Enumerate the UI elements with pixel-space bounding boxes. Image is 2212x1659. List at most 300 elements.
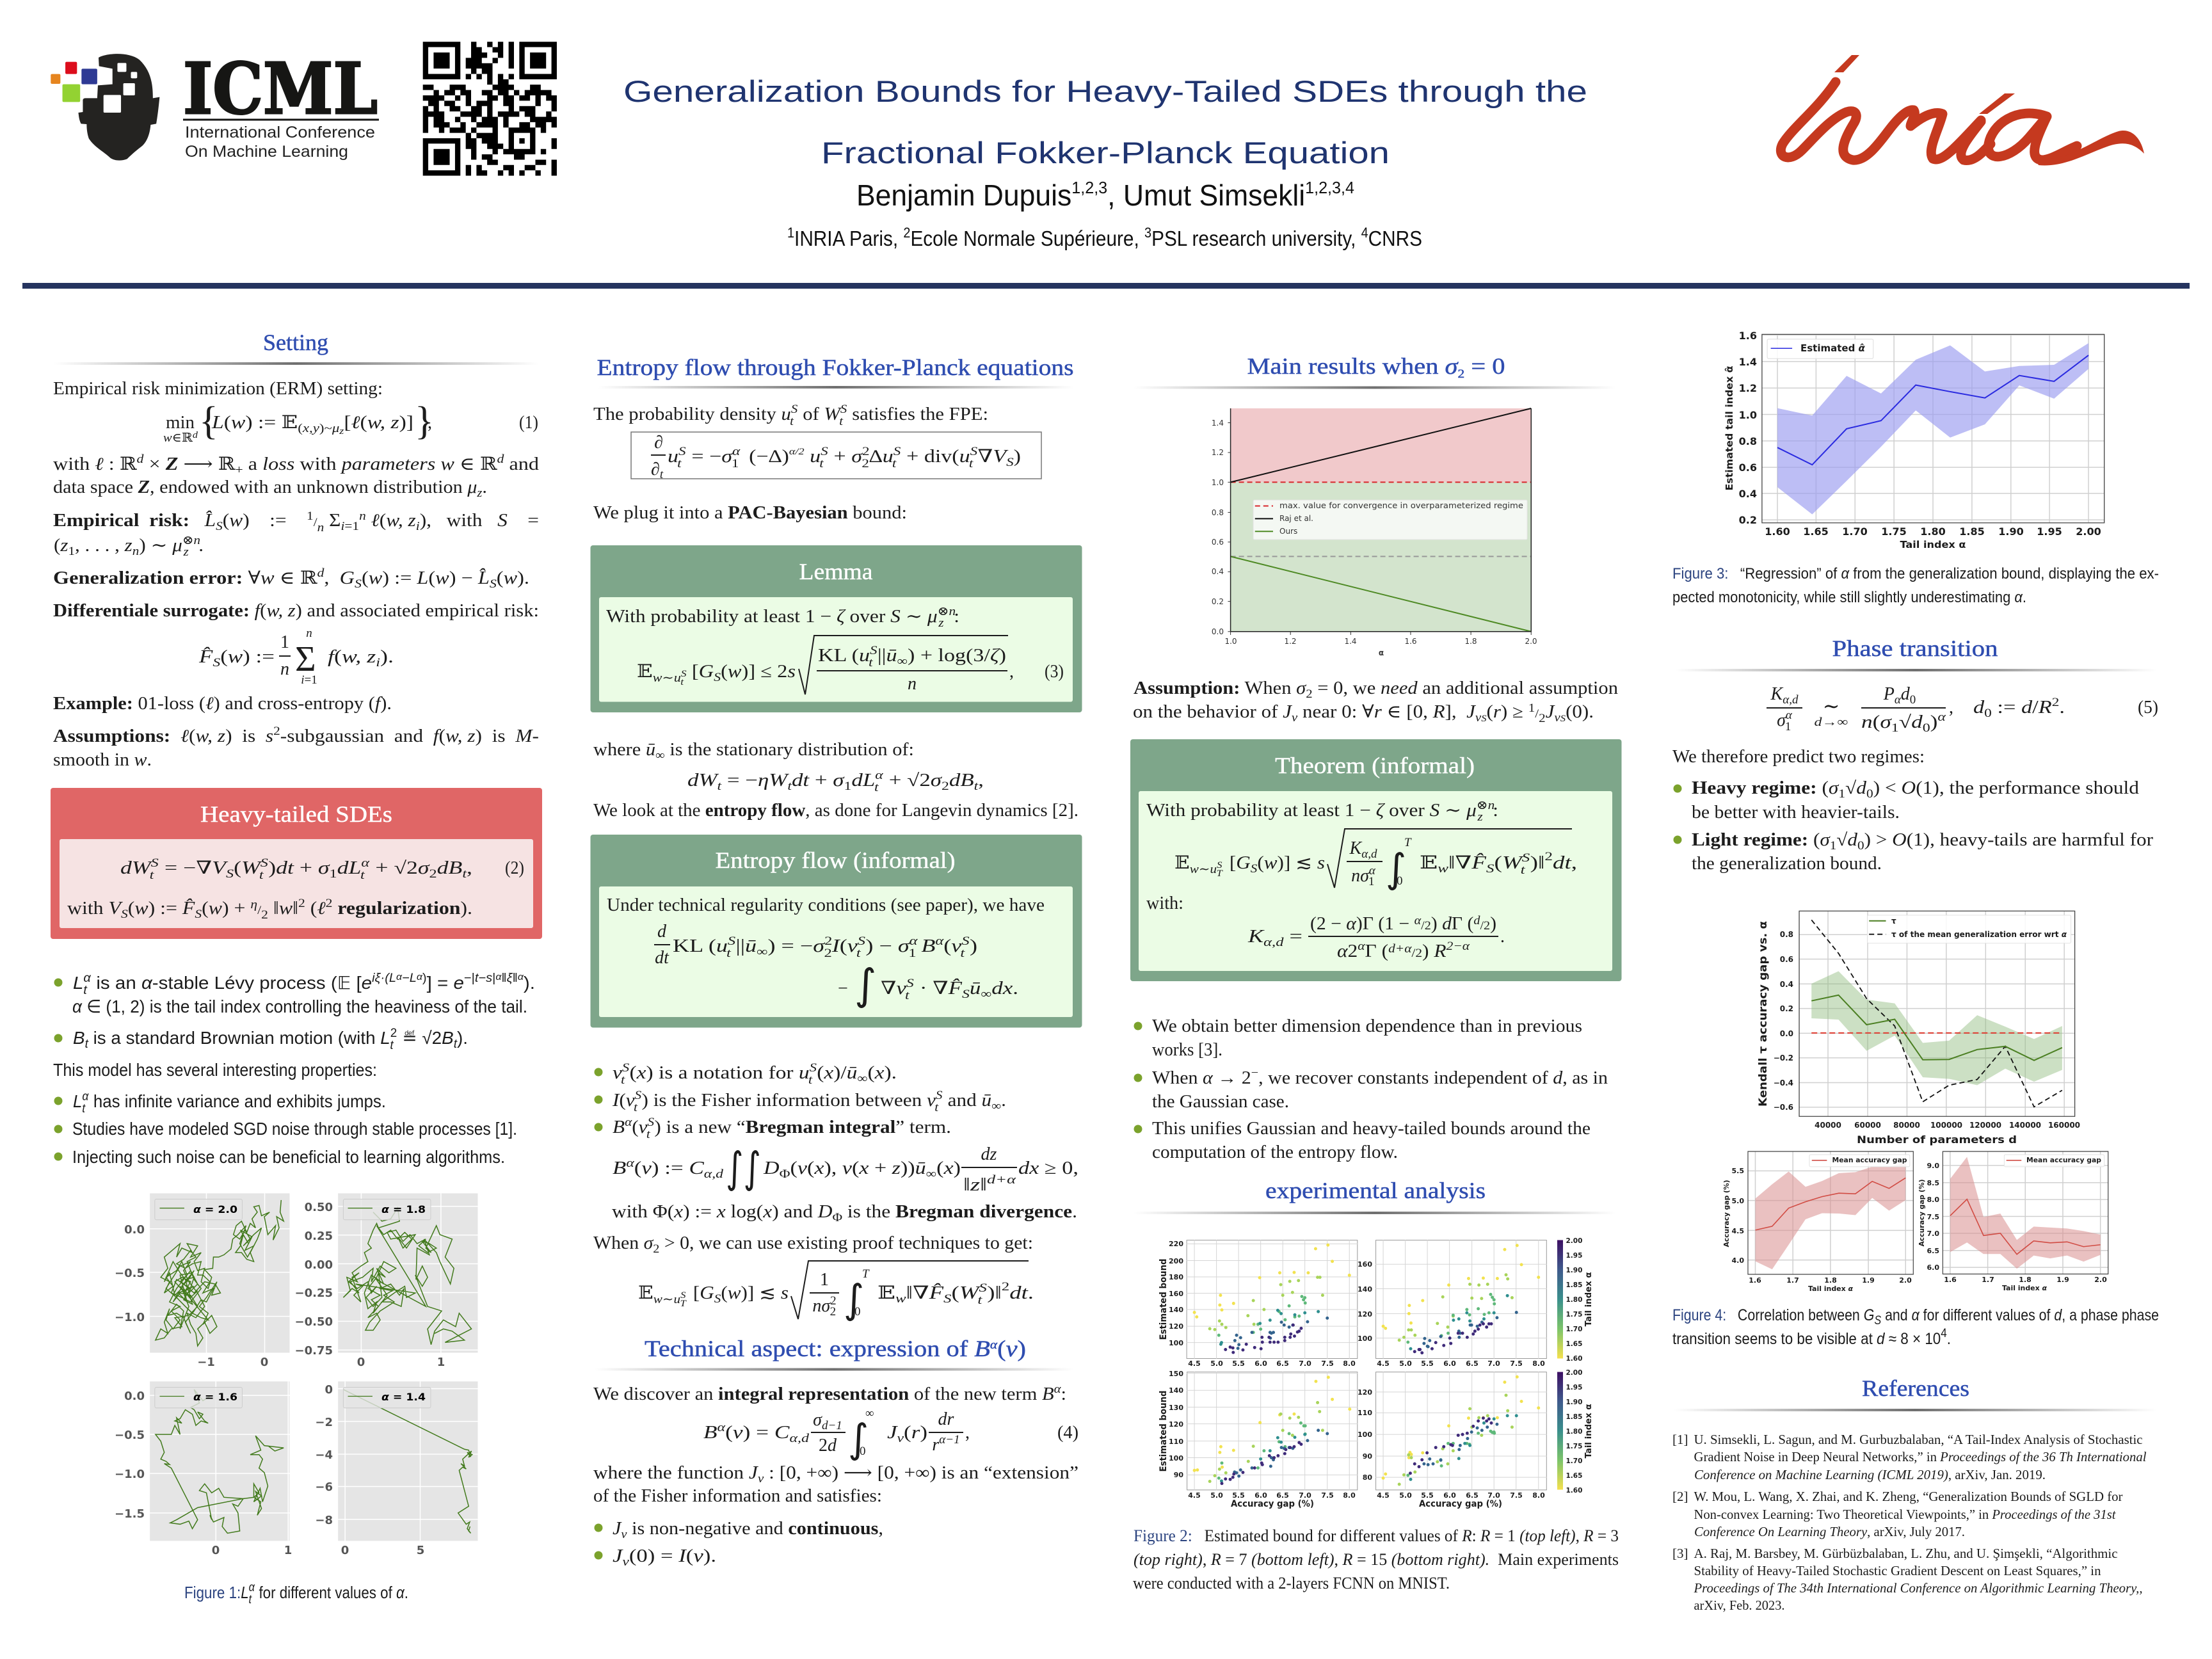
equation: entropy flow: dx	[991, 979, 1013, 998]
bullet list: regimes: d	[1856, 778, 1867, 798]
equation: K constant: /2	[1480, 919, 1490, 933]
bullet list: Lévy and Brownian: iξ·(L	[372, 972, 396, 985]
affiliations: 4	[1361, 225, 1368, 241]
figure 4: phase transition charts	[1672, 911, 2159, 1348]
equation: Bregman integral: α,d	[704, 1167, 724, 1181]
bullet list: Lévy and Brownian: α	[83, 972, 92, 985]
legend: colorbar bottom: 1.75	[1566, 1443, 1582, 1450]
text block: differentiable surrogate: w) :=	[228, 647, 268, 667]
bullet list: Lévy and Brownian: α	[396, 972, 403, 982]
bullet list: notations: S	[810, 1061, 817, 1075]
text block: ERM setting: and	[504, 454, 539, 474]
chart: constant comparison: 2.0	[1525, 637, 1537, 646]
equation 3: S	[870, 644, 878, 657]
text block: FPE intro: t	[839, 415, 844, 428]
equation 5: :=	[1992, 698, 2021, 717]
text block: stationary distribution: We look at the entropy flow, as done for Langevin dynamics [2].	[593, 801, 1078, 821]
heading: Lemma: Lemma	[799, 559, 873, 584]
equation 5: ,	[1949, 698, 1953, 717]
text: with: with:	[1146, 894, 1183, 913]
legend: colorbar top: 1.80	[1566, 1296, 1582, 1304]
heading: main results: Main results when σ	[1247, 353, 1456, 379]
affiliations: INRIA Paris,	[794, 227, 903, 250]
chart: scatter R=1: 220	[1169, 1240, 1183, 1248]
regularization line: (	[202, 899, 209, 918]
text block: differentiable surrogate: F̂	[198, 647, 213, 667]
equation: Bregman integral: (	[790, 1158, 797, 1178]
chart: walk alpha 1.6: 0	[212, 1544, 220, 1557]
equation: theorem bound	[1174, 829, 1577, 892]
heading: Setting: Setting	[263, 330, 328, 355]
title	[623, 74, 1587, 170]
equation: Bregman integral: x)	[944, 1158, 959, 1178]
figure 1: stable process trajectories	[115, 1193, 477, 1607]
chart: scatter R=7: 140	[1169, 1386, 1183, 1395]
equation 3: S	[714, 671, 721, 684]
chart: walk alpha 1.8: −0.25	[294, 1286, 333, 1300]
chart: scatter R=3: 7.5	[1510, 1359, 1523, 1368]
text block: differentiable surrogate	[53, 601, 539, 687]
chart: scatter R=1: 6.0	[1254, 1359, 1267, 1368]
chart: accuracy gap large d	[1918, 1151, 2108, 1292]
equation: K constant: /2	[1421, 919, 1431, 933]
text block: stationary distribution: dW	[687, 771, 719, 790]
equation: theorem bound: (	[1257, 853, 1264, 873]
legend: colorbar top: 1.90	[1566, 1267, 1582, 1274]
text block: example: Example: 01-loss ( ℓ) and cross-entropy ( f).	[53, 694, 392, 714]
text block: differentiable surrogate: Σ	[295, 639, 316, 679]
text block: ERM setting	[53, 379, 539, 500]
chart: walk alpha 1.8: −0.75	[294, 1344, 333, 1358]
icon: ICML head	[51, 54, 159, 161]
bullet list: theorem remarks: We obtain better dimension dependence than in previous	[1152, 1016, 1582, 1036]
caption: figure 1: α	[249, 1581, 255, 1594]
chart: walk alpha 1.8: 0.00	[305, 1258, 333, 1272]
chart: walk alpha 2.0: −1.0	[115, 1311, 145, 1324]
chart: walk alpha 2.0: α = 2.0	[193, 1203, 237, 1215]
text block: stationary distribution: dB	[949, 771, 974, 790]
heading: Entropy flow (informal): Entropy flow (informal)	[716, 847, 955, 873]
equation: theorem bound: w	[1438, 862, 1448, 876]
bullet list: regimes: the generalization bound.	[1692, 854, 1882, 874]
chart: walk alpha 1.6	[115, 1381, 292, 1557]
equation box: FPE: ∆	[869, 447, 883, 467]
caption: figure 3: pected monotonicity, while still slightly underestimating α.	[1672, 589, 2026, 606]
text block: stationary distribution: where ū	[593, 740, 655, 760]
text block: assumption: (	[1487, 702, 1493, 722]
bullet list: J_v properties: J	[613, 1546, 623, 1566]
chart: walk alpha 1.8: −0.50	[294, 1315, 333, 1329]
text block: empirical risk: z	[124, 536, 132, 556]
equation: theorem bound: ∫	[1386, 845, 1406, 892]
text block: assumptions: 2	[273, 725, 280, 738]
reference 2: Conference On Learning Theory, arXiv, July 2017.	[1694, 1524, 1965, 1539]
chart: scatter R=7: 110	[1169, 1438, 1183, 1446]
equation: bound with sigma2: dt	[1009, 1283, 1029, 1303]
bullet list: notations: v	[639, 1118, 648, 1137]
chart: scatter R=7: 120	[1169, 1420, 1183, 1429]
text block: empirical risk: n	[359, 509, 366, 523]
equation: theorem bound: ,	[1571, 853, 1576, 873]
equation: bound with sigma2: 2	[830, 1305, 836, 1318]
text block: differentiable surrogate: n	[306, 627, 312, 640]
equation: entropy flow: dt	[655, 948, 669, 968]
bullet list: Lévy and Brownian: B	[73, 1028, 85, 1048]
reference 3: [3]	[1672, 1546, 1688, 1561]
regularization line: /	[257, 904, 262, 917]
caption: figure 4: and	[1881, 1306, 1912, 1324]
equation: entropy flow: S	[906, 977, 914, 990]
equation: Bregman integral: ∫∫	[726, 1143, 761, 1192]
equation 2: σ	[418, 858, 430, 878]
equation box: FPE: S	[821, 445, 828, 458]
chart: walk alpha 1.4: 0	[325, 1383, 333, 1397]
equation: bound with sigma2: S	[680, 1290, 686, 1301]
chart: constant comparison: max. value for convergence in overparameterized regime	[1279, 501, 1523, 510]
bullet list: Lévy and Brownian: −|t−s|	[464, 972, 495, 985]
bullet list: notations: (	[868, 1063, 875, 1083]
chart: tail index regression: Tail index α	[1900, 539, 1966, 550]
equation box: FPE: t	[819, 457, 824, 470]
equation 3: ζ)	[990, 646, 1005, 666]
equation 4: d−1	[822, 1419, 842, 1432]
chart: Kendall tau vs parameters: τ of the mean generalization error wrt α	[1891, 930, 2067, 939]
equation: K constant: .	[1500, 927, 1505, 947]
equation 5: d	[1911, 712, 1923, 732]
legend: colorbar bottom: 1.85	[1566, 1413, 1582, 1421]
equation 3: S	[681, 669, 687, 679]
bullet list: Lévy and Brownian: α-stable Lévy process (𝔼 [ e	[141, 973, 371, 993]
caption: figure 4: Figure 4: Correlation between G	[1672, 1306, 1883, 1324]
reference 1: Conference on Machine Learning (ICML 2019), arXiv, Jan. 2019.	[1694, 1467, 2046, 1482]
bullet list: notations: v	[927, 1091, 936, 1110]
chart: scatter R=1: 160	[1169, 1290, 1183, 1298]
equation: entropy flow: ∫	[854, 960, 876, 1009]
equation: K constant: d+α	[1388, 942, 1413, 956]
bullet list: theorem remarks: −	[1251, 1066, 1258, 1080]
equation: theorem bound: T	[1404, 836, 1412, 849]
equation: bound with sigma2: w	[895, 1292, 906, 1306]
bullet list: notations: t	[621, 1073, 625, 1087]
chart: scatter R=7: 150	[1169, 1370, 1183, 1378]
chart: constant comparison: Raj et al.	[1279, 514, 1313, 523]
equation: theorem bound: w)] ≲ s	[1264, 853, 1324, 873]
heading: references: References	[1862, 1375, 1969, 1401]
equation: bound with sigma2: F̂	[928, 1283, 944, 1303]
text block: differentiable surrogate: (	[220, 647, 228, 667]
equation: entropy flow: (v	[840, 936, 855, 956]
text block: ERM setting: z	[476, 486, 483, 500]
equation: entropy flow: · ∇	[914, 979, 949, 998]
text block: stationary distribution: α	[875, 769, 884, 782]
equation: K constant: d	[1473, 914, 1480, 927]
heading: technical aspect: Technical aspect: expression of B	[645, 1336, 988, 1361]
text block: empirical risk: Empirical risk: L̂	[53, 511, 214, 531]
equation 2: t	[259, 869, 264, 882]
heading: technical aspect: v)	[1006, 1336, 1025, 1361]
equation 5: 0	[1910, 693, 1916, 707]
equation: entropy flow: ∞	[757, 945, 767, 959]
text block: ERM setting: d	[137, 453, 144, 466]
chart: scatter R=1: 7.0	[1299, 1359, 1311, 1368]
text block: ERM setting: d	[193, 430, 198, 440]
equation: theorem bound: F̂	[1471, 853, 1487, 873]
chart: scatter R=1: 140	[1169, 1306, 1183, 1314]
bullet list: notations: ū	[981, 1091, 991, 1110]
text block: stationary distribution: = −	[721, 771, 758, 790]
bullet list: J_v properties: (0) =	[629, 1546, 678, 1566]
regularization line: w‖	[279, 899, 298, 918]
text block: assumption: Assumption: When σ	[1134, 678, 1305, 698]
panel: experimental analysis	[1133, 1178, 1619, 1592]
text block: integral representation: α	[1054, 1382, 1062, 1396]
chart: accuracy gap large d: 8.5	[1927, 1179, 1939, 1187]
reference 3: Stability of Heavy-Tailed Stochastic Gradient Descent on Least Squares,” in	[1694, 1563, 2101, 1578]
equation 5: d/R	[2021, 698, 2049, 717]
equation: bound with sigma2	[638, 1261, 1034, 1322]
authors: 1,2,3,4	[1305, 178, 1354, 197]
equation: theorem bound: )‖	[1530, 853, 1544, 873]
chart: accuracy gap small d: Mean accuracy gap	[1832, 1156, 1907, 1164]
equation 5: α	[1937, 710, 1946, 724]
equation: bound with sigma2: 2	[830, 1294, 837, 1308]
bullet list: regimes	[1673, 778, 2154, 874]
affiliations: CNRS	[1368, 227, 1422, 250]
text block: ERM setting: Z ⟶ ℝ	[166, 454, 228, 474]
equation 4: (4)	[1057, 1423, 1078, 1443]
text block: empirical risk: /	[314, 516, 317, 529]
caption: figure 2: (top right), R = 7 (bottom left), R = 15 (bottom right). Main experiments	[1134, 1550, 1619, 1569]
equation 5: d→∞	[1814, 716, 1848, 729]
regularization line: w) := F̂	[134, 899, 193, 918]
theorem statement: ⊗n	[1477, 799, 1495, 812]
chart: Kendall tau vs parameters: Kendall τ accuracy gap vs. α	[1757, 921, 1770, 1107]
bullet list: regimes: ) >	[1864, 830, 1892, 850]
bullet list: J_v properties: continuous ,	[788, 1519, 883, 1539]
regularization line: 2	[261, 908, 268, 922]
equation 4: J	[887, 1423, 898, 1443]
bullet list: properties: t	[82, 1102, 86, 1116]
text block: empirical risk: ⊗n	[182, 534, 200, 547]
equation: theorem bound: S	[1486, 862, 1495, 876]
equation: theorem bound: S	[1251, 862, 1258, 876]
bullet list: theorem remarks	[1134, 1016, 1608, 1162]
chart: accuracy gap large d: 7.0	[1927, 1230, 1939, 1238]
text: Bregman divergence: with Φ( x) := x log(x) and D	[612, 1202, 831, 1222]
bullet list: notations: α	[625, 1116, 632, 1129]
equation 5: 0	[1984, 707, 1992, 720]
equation 2: dt + σ	[276, 858, 327, 878]
equation 2: ,	[467, 858, 472, 878]
chart: accuracy gap small d: Tail index α	[1808, 1285, 1853, 1293]
panel: lemma	[590, 545, 1082, 712]
chart: scatter R=15: 120	[1358, 1388, 1372, 1397]
chart: scatter R=15: 6.5	[1466, 1491, 1479, 1500]
equation box: FPE: u	[668, 447, 678, 467]
equation: K constant: α	[1415, 914, 1422, 927]
chart: tail index regression: Estimated α̂	[1800, 342, 1866, 354]
legend: colorbar top: 1.95	[1566, 1252, 1582, 1260]
chart: constant comparison: 0.6	[1212, 538, 1224, 547]
chart: accuracy gap small d: 4.5	[1732, 1227, 1744, 1235]
equation: K constant: =	[1284, 927, 1302, 947]
bullet list: J_v properties	[594, 1519, 883, 1569]
chart: Kendall tau vs parameters: 120000	[1969, 1121, 2001, 1130]
heading: Heavy-tailed SDEs: Heavy-tailed SDEs	[200, 801, 392, 827]
text block: stationary distribution: t	[787, 780, 792, 793]
text block: function J_v: v	[758, 1472, 764, 1486]
equation: entropy flow: KL ( u	[673, 936, 725, 956]
text: two regimes intro: We therefore predict two regimes:	[1672, 747, 1925, 767]
chart: scatter R=1: 120	[1169, 1322, 1183, 1331]
equation: Bregman integral: ‖z‖	[963, 1175, 985, 1195]
bullet list: Lévy and Brownian: )	[422, 972, 427, 985]
text block: differentiable surrogate: S	[212, 656, 221, 669]
heading: Theorem: Theorem (informal)	[1275, 753, 1475, 778]
chart: scatter R=1: 7.5	[1321, 1359, 1334, 1368]
text: Bregman divergence: is the	[842, 1202, 895, 1222]
text block: stationary distribution: is the stationary distribution of:	[665, 740, 914, 760]
equation box: FPE: σ	[851, 447, 863, 467]
bullet list: J_v properties: is non-negative and	[627, 1519, 788, 1539]
equation: K constant: Γ (	[1365, 942, 1388, 961]
equation box: FPE: u	[959, 447, 970, 467]
equation 3: w)] ≤ 2 s	[728, 662, 794, 682]
chart: tail index regression: 1.75	[1881, 525, 1907, 538]
bullet list: regimes: 1	[1838, 787, 1845, 801]
equation 3: w∼u	[653, 671, 681, 685]
text block: ERM setting: }	[415, 399, 434, 443]
equation 3: ,	[1009, 662, 1014, 682]
equation box: FPE: S	[970, 445, 978, 458]
equation box: FPE: S	[894, 445, 901, 458]
chart: tail index regression: 1.4	[1739, 356, 1757, 368]
text block: assumption: on the behavior of J	[1133, 702, 1291, 722]
reference 1: Gradient Noise in Deep Neural Networks,” in Proceedings of the 36 Th International	[1694, 1449, 2147, 1464]
equation: Bregman integral: d+α	[987, 1173, 1016, 1187]
chart: scatter R=15: Accuracy gap (%)	[1419, 1499, 1502, 1509]
chart: Kendall tau vs parameters: 40000	[1815, 1121, 1841, 1130]
equation: K constant: α2	[1337, 942, 1357, 961]
reference 2	[1672, 1489, 2122, 1539]
equation: bound with sigma2: ∫	[844, 1276, 864, 1322]
equation 2: )	[268, 858, 276, 878]
text block: FPE intro: W	[824, 405, 842, 424]
chart: walk alpha 1.4: α = 1.4	[381, 1391, 426, 1403]
text block: ERM setting: .	[482, 477, 487, 497]
equation 5: d	[1901, 684, 1911, 704]
equation: bound with sigma2: G	[700, 1283, 714, 1303]
equation: entropy flow	[654, 922, 1018, 1009]
equation: bound with sigma2: .	[1028, 1283, 1032, 1303]
chart: scatter R=15: 100	[1358, 1431, 1372, 1439]
lemma statement: ⊗n	[938, 605, 956, 618]
equation 4: α	[717, 1421, 726, 1434]
chart: accuracy gap large d: 1.9	[2056, 1276, 2069, 1284]
chart: walk alpha 1.6: −0.5	[115, 1429, 145, 1442]
equation: theorem bound: 0	[1397, 874, 1403, 888]
logo: ICML: On Machine Learning	[185, 143, 348, 161]
text block: differentiable surrogate: n	[280, 659, 289, 679]
equation: entropy flow: t	[960, 947, 965, 960]
legend: colorbar bottom: 1.90	[1566, 1399, 1582, 1406]
logo: ICML: International Conference	[185, 124, 375, 141]
text block: empirical risk: 1	[68, 545, 75, 558]
bullet list: theorem remarks: , we recover constants independent of	[1258, 1068, 1553, 1088]
equation: entropy flow: ū	[745, 936, 757, 956]
equation: theorem bound: T	[1217, 869, 1224, 879]
chart: scatter R=15: 5.0	[1399, 1491, 1412, 1500]
bullet list: notations: t	[808, 1073, 813, 1087]
equation: bound with sigma2: 𝔼	[638, 1283, 652, 1303]
bullet list: Lévy and Brownian: −L	[402, 972, 417, 985]
equation 5: P	[1883, 684, 1895, 704]
text block: empirical risk: n	[317, 521, 324, 534]
chart: scatter R=15: 5.5	[1421, 1491, 1434, 1500]
chart: scatter R=1: 200	[1169, 1257, 1183, 1265]
figure 3: estimated tail index	[1672, 330, 2159, 606]
chart: accuracy gap small d: 5.0	[1732, 1197, 1744, 1205]
chart: accuracy gap large d: 6.0	[1927, 1263, 1939, 1272]
reference 2: Non-convex Learning: Two Theoretical Viewpoints,” in Proceedings of the 31st	[1694, 1507, 2117, 1522]
text block: assumptions: Assumptions: ℓ(w, z) is s	[53, 726, 273, 746]
chart: walk alpha 1.6: −1.5	[115, 1507, 145, 1521]
equation: bound with sigma2: 2	[1002, 1280, 1009, 1294]
equation: bound with sigma2: W	[959, 1283, 981, 1303]
equation box: FPE: 1	[732, 457, 739, 470]
equation 4	[703, 1407, 1078, 1462]
chart: tail index regression: 1.70	[1842, 525, 1868, 538]
equation 5: )	[1930, 712, 1937, 732]
equation: K constant: α	[1358, 940, 1366, 953]
panel: Bregman integral	[593, 1061, 1078, 1322]
chart: scatter R=1: 100	[1169, 1339, 1183, 1347]
bullet list: properties: α	[82, 1090, 89, 1103]
text block: generalization error: w) := L(w) − L̂	[369, 568, 488, 588]
reference 2: [2]	[1672, 1489, 1688, 1504]
equation: K constant: K	[1247, 927, 1265, 947]
bullet list: regimes: √	[1845, 778, 1857, 798]
regularization line: (	[305, 899, 317, 918]
logo: Inria	[1781, 55, 2144, 165]
caption: figure 4: 4	[1941, 1327, 1947, 1340]
bullet list: Lévy and Brownian: ).	[524, 973, 535, 993]
equation 4: ∫	[848, 1415, 869, 1462]
bullet list: notations: ) is the Fisher information between	[642, 1091, 927, 1110]
equation: bound with sigma2: t	[977, 1294, 982, 1307]
legend: colorbar bottom: 1.65	[1566, 1472, 1582, 1480]
reference 3: arXiv, Feb. 2023.	[1694, 1598, 1784, 1613]
equation 5: 1	[1891, 721, 1899, 735]
equation 2: W	[241, 858, 262, 878]
chart: tail index regression: 1.2	[1739, 382, 1757, 394]
chart: scatter R=7: 100	[1169, 1454, 1183, 1463]
caption: figure 2: Figure 2: Estimated bound for different values of R: R = 1 (top left), R = 3	[1134, 1527, 1619, 1545]
equation 2: V	[212, 858, 228, 878]
equation: bound with sigma2: (	[721, 1283, 728, 1303]
equation: theorem bound: 2	[1544, 850, 1553, 863]
panel: entropy flow informal	[590, 835, 1082, 1028]
text block: generalization error: Generalization error: ∀w ∈ ℝ	[53, 568, 312, 588]
equation: entropy flow: S	[858, 934, 866, 948]
chart: walk alpha 2.0	[115, 1193, 289, 1369]
chart: scatter R=3: 7.0	[1487, 1359, 1500, 1368]
equation: theorem bound: S	[1217, 860, 1222, 870]
chart: tail index regression: 0.8	[1739, 435, 1757, 447]
equation box: FPE: + div(	[901, 447, 959, 467]
text block: assumption: J	[1546, 702, 1555, 722]
equation 2: S	[260, 856, 269, 870]
